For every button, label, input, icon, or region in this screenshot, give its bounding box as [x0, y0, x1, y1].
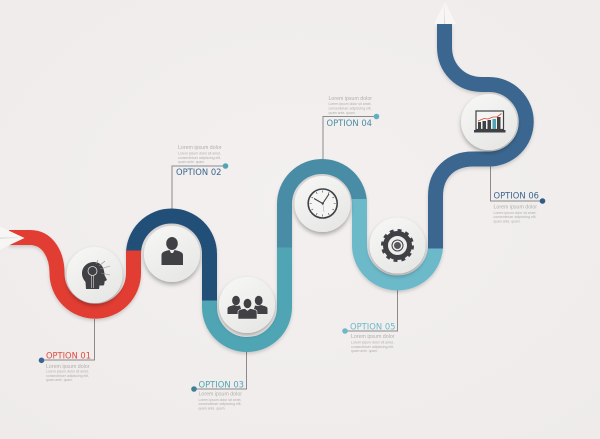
step 5 disc with gear icon: [370, 218, 426, 274]
option 02 label: Lorem ipsum dolor: [178, 145, 222, 151]
icon: person: [162, 237, 183, 265]
road segment: dark blue: [134, 216, 210, 300]
option 01 label: [39, 352, 91, 382]
option 06 label: Lorem ipsum dolor: [494, 204, 537, 210]
option 01 label: Lorem ipsum dolor sit amet,: [46, 370, 89, 374]
option 05 label: Lorem ipsum dolor sit amet,: [351, 340, 394, 344]
step 3 disc with team icon: [219, 277, 275, 333]
option 04 label: [326, 96, 379, 129]
icon: laptop chart: [474, 111, 506, 132]
option 05 label: OPTION 05: [350, 322, 396, 332]
option 05 label: quam ante. quam.: [351, 349, 378, 353]
option 04 label: Lorem ipsum dolor: [328, 96, 372, 102]
road segment: teal: [210, 248, 284, 344]
option 05 label: Lorem ipsum dolor: [351, 334, 395, 340]
option 03 label: Lorem ipsum dolor: [198, 392, 242, 398]
icon: head with light bulb: [82, 260, 110, 289]
option 03 label: OPTION 03: [198, 380, 244, 390]
option 03 label: consectetuer adipiscing elit,: [198, 402, 242, 406]
leader lines: [42, 116, 542, 389]
option 06 label: Lorem ipsum dolor sit amet,: [494, 211, 536, 215]
option 04 label: OPTION 04: [326, 119, 372, 129]
option 06 label: [494, 192, 545, 223]
option 02 label: [176, 145, 228, 178]
option 02 label: OPTION 02: [176, 168, 222, 178]
road segment: light teal: [360, 199, 436, 283]
step 6 disc with laptop icon: [461, 94, 517, 150]
option 02 label: consectetuer adipiscing elit,: [178, 156, 221, 160]
option 01 label: quam ante. quam.: [46, 378, 73, 382]
winding road: [9, 24, 526, 344]
option 05 label: [342, 322, 396, 353]
option 03 label: quam ante. quam.: [198, 406, 226, 410]
step 2 disc with person icon: [144, 226, 200, 282]
option 05 label: consectetuer adipiscing elit,: [351, 345, 394, 349]
option 02 label: quam ante. quam.: [178, 160, 205, 164]
option 04 label: quam ante. quam.: [328, 111, 356, 115]
option 01 label: consectetuer adipiscing elit,: [46, 374, 89, 378]
option 04 label: Lorem ipsum dolor sit amet,: [328, 102, 372, 106]
option 03 label: [191, 380, 244, 410]
icon: clock: [308, 189, 337, 218]
option 04 label: consectetuer adipiscing elit,: [328, 106, 372, 110]
option 03 label: Lorem ipsum dolor sit amet,: [198, 398, 242, 402]
step 4 disc with clock icon: [294, 176, 350, 232]
option 06 label: quam ante. quam.: [494, 219, 521, 223]
icon: gear: [382, 230, 412, 260]
option 01 label: Lorem ipsum dolor: [46, 364, 90, 370]
icon: team: [228, 296, 268, 319]
road segment: mid teal: [284, 166, 360, 248]
road segment: blue: [436, 24, 526, 248]
road segment: red: [9, 238, 134, 311]
option 06 label: OPTION 06: [494, 192, 539, 202]
option 02 label: Lorem ipsum dolor sit amet,: [178, 152, 221, 156]
option 01 label: OPTION 01: [46, 352, 91, 362]
option 06 label: consectetuer adipiscing elit,: [494, 215, 536, 219]
step 1 disc with head icon: [66, 247, 122, 303]
arrow: end: [434, 2, 456, 24]
arrow: start: [0, 226, 24, 250]
